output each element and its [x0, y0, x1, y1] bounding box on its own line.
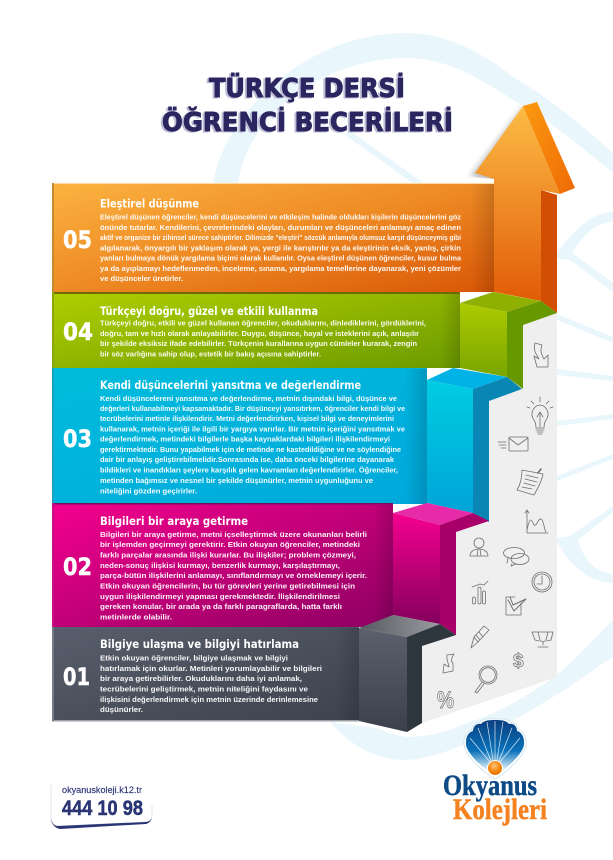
panel 03: Kendi düşüncelerini: tecrübelerini metinle ilişkilendirir. Metni değerlendirirken, kişisel bilgi ve deneyimlerini — [100, 414, 394, 423]
panel 03: Kendi düşüncelerini: metinden bağımsız ve nesnel bir şekilde düşünürler, metnin uygunluğunu ve — [100, 476, 374, 485]
pearl — [488, 760, 502, 776]
panel 05: Eleştirel düşünme: aktif ve organize bir zihinsel sürece sahiptirler. Dilimizde "eleştiri" sözcük anlamıyla olumsuz karşıt düşünceymiş gibi — [100, 233, 461, 242]
icon: chat bubbles — [504, 548, 529, 566]
panel 05: Eleştirel düşünme — [52, 183, 494, 292]
icon: clock — [532, 572, 552, 592]
panel 02: Bilgileri bir araya getirme: bir işlemden geçirmeyi gerektirir. Etkin okuyan öğrenciler, metindeki — [100, 540, 360, 549]
icon: check box — [506, 597, 526, 615]
arrow — [470, 102, 575, 313]
shell — [464, 719, 526, 779]
grey icon wall — [422, 313, 557, 723]
panel 04: Türkçeyi doğru: bir şekilde eksiksiz ifade edebilirler. Türkçenin kurallarına uygun cümleler kurarak, zengin — [100, 339, 417, 348]
panel 02: Bilgileri bir araya getirme: Bilgileri bir araya getirme — [100, 514, 248, 528]
panel 05: Eleştirel düşünme: önünde tutarlar. Kendilerini, çevrelerindeki olayları, durumları ve düşünceleri anlamayı amaç edinen — [100, 223, 461, 232]
panel 03: Kendi düşüncelerini — [52, 368, 427, 504]
icon: note sheet — [517, 469, 543, 495]
dark step block — [359, 615, 456, 732]
panel 02: Bilgileri bir araya getirme: farklı parçalar arasında ilişki kurarlar. Bu ilişkiler; problem çözmeyi, — [100, 550, 356, 560]
icon: trophy — [532, 632, 553, 647]
panel 05: Eleştirel düşünme: Eleştirel düşünen öğrenciler, kendi düşüncelerini ve etkileşim halinde oldukları kişilerin düşüncelerini göz — [100, 212, 461, 222]
panel 01: Bilgiye ulaşma: ilişkisini değerlendirmek için metnin üzerinde derinlemesine — [100, 695, 319, 704]
background swooshes — [213, 33, 613, 760]
panel 05: Eleştirel düşünme: ya da ayıplamayı hedeflenmeden, inceleme, sınama, yargılama temellerine dayanarak, yeni çözümler — [100, 264, 461, 273]
icon: small arrow — [443, 654, 454, 673]
phone: 444 10 98 — [62, 797, 143, 820]
panel 03: Kendi düşüncelerini: dair bir anlayış geliştirebilmelidir.Sonrasında ise, daha önceki bilgilerine dayanarak — [100, 455, 395, 464]
logo — [443, 719, 547, 826]
green step block — [460, 292, 557, 389]
title — [162, 71, 453, 138]
panel 04: Türkçeyi doğru: bir söz varlığına sahip olup, estetik bir bakış açısına sahiptirler. — [100, 350, 321, 358]
panel 05: Eleştirel düşünme: ve düşünceler üretirler. — [100, 274, 183, 283]
panel 02: Bilgileri bir araya getirme — [52, 503, 393, 627]
panel 04: Türkçeyi doğru: 04 — [63, 318, 93, 346]
icon: dollar sign: $ — [513, 651, 524, 672]
panel 02: Bilgileri bir araya getirme: Bilgileri bir araya getirme, metni içselleştirmek üzere okunanları belirli — [100, 530, 367, 539]
icon: envelope — [498, 437, 528, 451]
icon: person — [470, 538, 488, 556]
pink step block — [393, 503, 489, 635]
panel 05: Eleştirel düşünme: Eleştirel düşünme — [100, 197, 199, 211]
panel 03: Kendi düşüncelerini: değerleri kullanabilmeyi kapsamaktadır. Bir düşünceyi yansıtırken, öğrenciler kendi bilgi ve — [100, 404, 406, 413]
icon: curved arrow — [534, 343, 548, 367]
panel 04: Türkçeyi doğru: Türkçeyi doğru, güzel ve etkili kullanma — [100, 304, 318, 318]
panel 01: Bilgiye ulaşma: Bilgiye ulaşma ve bilgiyi hatırlama — [100, 637, 299, 651]
blue step block — [427, 368, 522, 522]
icons on wall — [437, 343, 553, 714]
title: TÜRKÇE DERSİ — [209, 71, 405, 104]
panel 01: Bilgiye ulaşma: hatırlamak için okurlar. Metinleri yorumlayabilir ve bilgileri — [100, 664, 322, 673]
panel 03: Kendi düşüncelerini: gerektirmektedir. Bunu yapabilmek için de metinde ne kastedildiğine ve ne söylendiğine — [100, 445, 402, 454]
panel 03: Kendi düşüncelerini: kullanarak, metnin içeriği ile ilgili bir yargıya varırlar. Bir metnin içeriğini yansıtmak ve — [100, 424, 406, 434]
panel 03: Kendi düşüncelerini: niteliğini gözden geçirirler. — [100, 486, 197, 496]
icon: light bulb — [527, 397, 553, 434]
icon: line chart — [525, 510, 548, 533]
panel 04: Türkçeyi doğru: doğru, tam ve hızlı olarak anlayabilirler. Duygu, düşünce, hayal ve isteklerini açık, anlaşılır — [100, 329, 419, 338]
panel 02: Bilgileri bir araya getirme: neden-sonuç ilişkisi kurmayı, benzerlik kurmayı, karşılaştırmayı, — [100, 561, 340, 570]
panel 02: Bilgileri bir araya getirme: gereken konular, bir arada ya da farklı paragraflarda, hatta farklı — [100, 602, 342, 611]
icon: magnifier — [475, 666, 497, 693]
website: okyanuskoleji.k12.tr — [62, 785, 142, 796]
icon: pencil — [471, 626, 489, 648]
panel 03: Kendi düşüncelerini: Kendi düşüncelereni yansıtma ve değerlendirme, metnin dışındaki bilgi, düşünce ve — [100, 394, 398, 403]
panel 02: Bilgileri bir araya getirme: 02 — [63, 553, 92, 581]
panel 01: Bilgiye ulaşma: tecrübelerini geliştirmek, metnin niteliğini faydasını ve — [100, 684, 309, 694]
panel 02: Bilgileri bir araya getirme: uygun ilişkilendirmeyi yapması gerekmektedir. İlişkilendirilmesi — [100, 592, 340, 601]
panel 02: Bilgileri bir araya getirme: parça-bütün ilişkilerini anlamayı, sınıflandırmayı ve örneklemeyi içerir. — [100, 571, 367, 580]
logo subtitle: Kolejleri — [453, 793, 547, 826]
panel 01: Bilgiye ulaşma: düşünürler. — [100, 705, 143, 714]
panel 01: Bilgiye ulaşma: Etkin okuyan öğrenciler, bilgiye ulaşmak ve bilgiyi — [100, 654, 288, 662]
panel 01: Bilgiye ulaşma: bir araya getirebilirler. Okuduklarını daha iyi anlamak, — [100, 674, 302, 683]
icon: percent: % — [437, 687, 454, 714]
panel 05: Eleştirel düşünme: 05 — [63, 226, 92, 254]
panel 05: Eleştirel düşünme: algılanarak, önyargılı bir yaklaşım olarak ya, yergi ile karıştırılır ya da eleştirinin eksik, yanlış, çirkin — [100, 243, 461, 252]
panel 03: Kendi düşüncelerini: Kendi düşüncelerini yansıtma ve değerlendirme — [100, 378, 361, 392]
panel 02: Bilgileri bir araya getirme: metinlerde olabilir. — [100, 612, 172, 622]
panel 03: Kendi düşüncelerini: 03 — [63, 425, 92, 453]
panel 03: Kendi düşüncelerini: bildikleri ve inandıkları şeylere karşılık gelen kavramları değerlendirirler. Öğrenciler, — [100, 466, 398, 474]
title: ÖĞRENCİ BECERİLERİ — [162, 105, 453, 138]
logo name: Okyanus — [443, 769, 537, 802]
panel 01: Bilgiye ulaşma: 01 — [63, 663, 90, 691]
panel 04: Türkçeyi doğru — [52, 292, 460, 368]
panel 03: Kendi düşüncelerini: değerlendirmek, metindeki bilgilerle başka kaynaklardaki bilgileri ilişkilendirmeyi — [100, 434, 390, 444]
icon: bars and trend — [472, 581, 488, 604]
panel 01: Bilgiye ulaşma — [52, 627, 359, 722]
contact box — [51, 785, 152, 829]
panel 05: Eleştirel düşünme: yanları bulmaya dönük yargılama biçimi olarak kullanılır. Oysa eleştirel düşünen öğrenciler, kusur bulma — [100, 254, 462, 262]
panel 02: Bilgileri bir araya getirme: Etkin okuyan öğrencilerin, bu tür görevleri yerine getirebilmesi için — [100, 582, 355, 590]
panel 04: Türkçeyi doğru: Türkçeyi doğru, etkili ve güzel kullanan öğrenciler, okuduklarını, dinlediklerini, gördüklerini, — [100, 318, 426, 328]
